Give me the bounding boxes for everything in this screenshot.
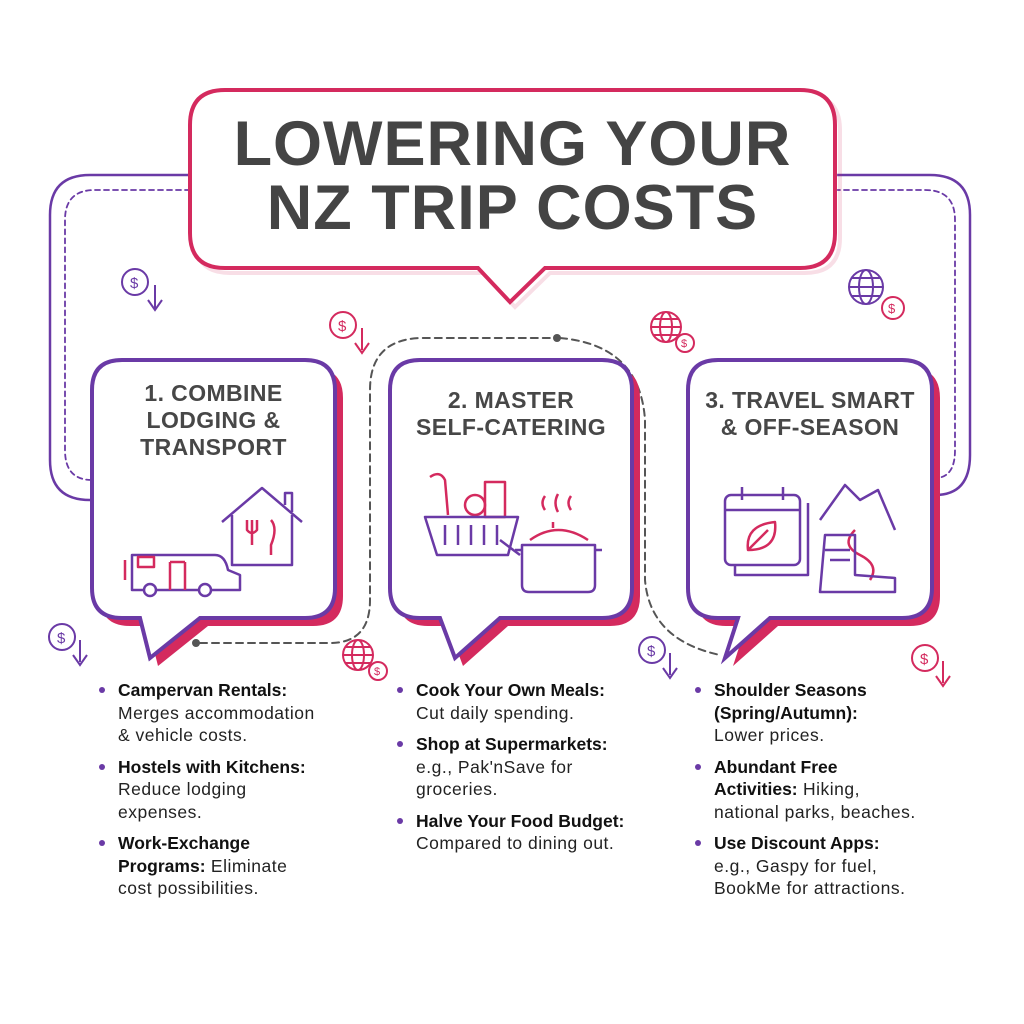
icon: basket and pot <box>425 474 602 592</box>
text block: column 2: Halve Your Food Budget: <box>416 810 624 830</box>
text block: column 1: Hostels with Kitchens: <box>118 756 306 776</box>
text block: column 3: BookMe for attractions. <box>714 878 905 898</box>
text block: column 2: Cook Your Own Meals: <box>416 680 605 700</box>
heading: panel 1 <box>140 380 287 460</box>
text block: column 1: Reduce lodging <box>118 779 247 799</box>
heading: panel 1: TRANSPORT <box>140 434 287 460</box>
text block: column 3: (Spring/Autumn): <box>714 702 858 722</box>
text block: column 1: cost possibilities. <box>118 878 259 898</box>
text block: column 2: Compared to dining out. <box>416 833 614 853</box>
icon: campervan and house <box>125 488 302 596</box>
connector: dashed links <box>200 338 720 655</box>
icon: calendar and boot <box>725 485 895 592</box>
title box <box>190 90 840 307</box>
title: NZ TRIP COSTS <box>267 173 758 243</box>
text block: column 3: national parks, beaches. <box>714 802 916 822</box>
text block: column 1: Merges accommodation <box>118 702 315 722</box>
icons: small dollar arrows: $ <box>647 643 656 660</box>
title <box>234 109 791 243</box>
text block: column 3: Shoulder Seasons <box>714 680 867 700</box>
text block: column 1: expenses. <box>118 802 202 822</box>
text block: column 3: Lower prices. <box>714 725 825 745</box>
text block: column 1: Work-Exchange <box>118 833 250 853</box>
text block: column 3: Use Discount Apps: <box>714 833 880 853</box>
connector: left outer <box>50 175 190 500</box>
text block: column 1 <box>99 680 315 898</box>
heading: panel 3: 3. TRAVEL SMART <box>705 387 915 413</box>
heading: panel 1: LODGING & <box>147 407 280 433</box>
heading: panel 3 <box>705 387 915 440</box>
text block: column 3: e.g., Gaspy for fuel, <box>714 856 877 876</box>
icons: small dollar arrows: $ <box>338 318 347 335</box>
text block: column 3: Abundant Free <box>714 756 837 776</box>
panel 1 shape <box>92 360 343 666</box>
heading: panel 2: SELF-CATERING <box>416 414 606 440</box>
text block: column 2: groceries. <box>416 779 498 799</box>
heading: panel 3: & OFF-SEASON <box>721 414 899 440</box>
icons: small dollar arrows: $ <box>130 275 139 292</box>
icons: small dollar arrows: $ <box>57 630 66 647</box>
title: LOWERING YOUR <box>234 109 791 179</box>
text block: column 3 <box>695 680 916 898</box>
heading: panel 2 <box>416 387 606 440</box>
icons: small dollar arrows: $ <box>920 651 929 668</box>
connector: right outer <box>835 175 970 495</box>
text block: column 1: Programs: Eliminate <box>118 856 287 876</box>
icons: globes: $ <box>374 666 380 678</box>
icons: small dollar arrows <box>49 269 950 686</box>
panel 3 shape <box>688 360 940 666</box>
icons: globes <box>343 270 904 680</box>
icons: globes: $ <box>681 338 687 350</box>
panel 2 shape <box>390 360 640 666</box>
text block: column 2: Shop at Supermarkets: <box>416 734 608 754</box>
icons: globes: $ <box>888 301 896 316</box>
text block: column 1: & vehicle costs. <box>118 725 248 745</box>
text block: column 2: Cut daily spending. <box>416 702 574 722</box>
heading: panel 2: 2. MASTER <box>448 387 574 413</box>
text block: column 2 <box>397 680 624 853</box>
text block: column 3: Activities: Hiking, <box>714 779 860 799</box>
heading: panel 1: 1. COMBINE <box>144 380 283 406</box>
text block: column 1: Campervan Rentals: <box>118 680 287 700</box>
text block: column 2: e.g., Pak'nSave for <box>416 756 573 776</box>
